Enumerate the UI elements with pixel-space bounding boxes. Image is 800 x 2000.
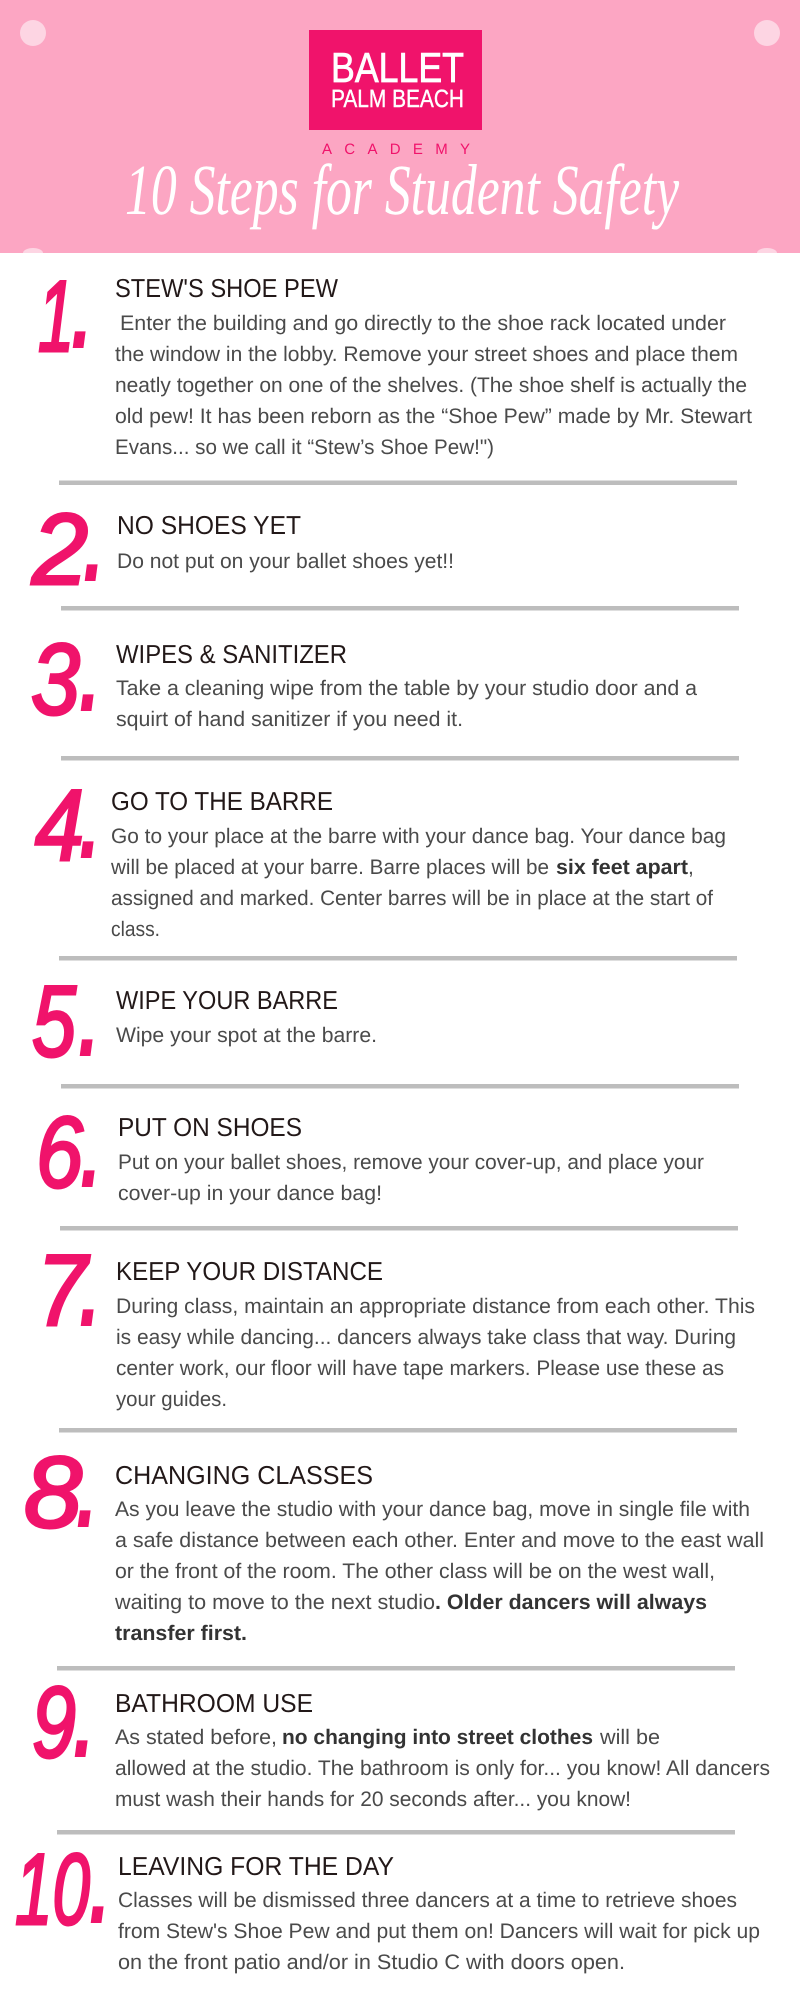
number 4: . <box>79 757 100 882</box>
body text: your guides. <box>116 1388 227 1411</box>
panel: step 5 <box>32 955 377 1080</box>
body text <box>115 312 752 459</box>
number 4: 4 <box>35 770 84 882</box>
body text: Put on your ballet shoes, remove your cover-up, and place your <box>118 1151 704 1174</box>
body text <box>116 1295 755 1411</box>
body text: As you leave the studio with your dance bag, move in single file with <box>115 1498 750 1521</box>
body text: Go to your place at the barre with your dance bag. Your dance bag <box>111 825 726 848</box>
body text: cover-up in your dance bag! <box>118 1182 382 1205</box>
heading: BATHROOM USE <box>115 1688 313 1718</box>
body text: Enter the building and go directly to the shoe rack located under <box>120 312 726 335</box>
body text: no changing into street clothes <box>282 1726 593 1749</box>
number 5: 5 <box>32 966 77 1078</box>
body text: must wash their hands for 20 seconds after... you know! <box>115 1788 631 1811</box>
number 1: . <box>71 247 92 372</box>
heading: WIPE YOUR BARRE <box>116 985 338 1015</box>
panel: step 4 <box>35 757 726 941</box>
body text <box>116 677 697 731</box>
body text: . Older dancers will always <box>435 1591 707 1614</box>
panel: step 7 <box>37 1225 755 1411</box>
number 5: . <box>78 955 99 1080</box>
body text: old pew! It has been reborn as the “Shoe Pew” made by Mr. Stewart <box>115 405 752 428</box>
heading: KEEP YOUR DISTANCE <box>116 1256 383 1286</box>
body text: center work, our floor will have tape markers. Please use these as <box>116 1357 724 1380</box>
heading: LEAVING FOR THE DAY <box>118 1851 394 1881</box>
body text: squirt of hand sanitizer if you need it. <box>116 708 463 731</box>
body text <box>118 1151 704 1205</box>
number 2 <box>31 480 104 606</box>
body text: a safe distance between each other. Enter and move to the east wall <box>115 1529 764 1552</box>
number 3: . <box>79 610 100 735</box>
body text <box>110 825 726 941</box>
number 10: . <box>89 1822 110 1947</box>
number 8: 8 <box>24 1437 82 1549</box>
panel: step 8 <box>24 1426 764 1645</box>
number 6: 6 <box>36 1097 84 1209</box>
body text: Do not put on your ballet shoes yet!! <box>117 550 454 573</box>
body text: Take a cleaning wipe from the table by your studio door and a <box>116 677 697 700</box>
body text: waiting to move to the next studio <box>114 1591 435 1614</box>
heading: NO SHOES YET <box>117 510 301 540</box>
body text: Wipe your spot at the barre. <box>116 1024 377 1047</box>
number 6: . <box>80 1086 101 1211</box>
body text <box>114 1498 764 1645</box>
body text: , <box>688 856 694 879</box>
number 2: . <box>83 480 104 605</box>
number 2: 2 <box>31 494 88 606</box>
number 8: . <box>76 1426 97 1551</box>
body text: class. <box>111 918 160 941</box>
body text: neatly together on one of the shelves. (The shoe shelf is actually the <box>115 374 747 397</box>
heading: PUT ON SHOES <box>118 1112 302 1142</box>
body text <box>118 1889 760 1974</box>
body text: assigned and marked. Center barres will be in place at the start of <box>111 887 713 910</box>
body text: Classes will be dismissed three dancers at a time to retrieve shoes <box>118 1889 737 1912</box>
number 1: 1 <box>38 261 74 373</box>
body text: the window in the lobby. Remove your street shoes and place them <box>115 343 738 366</box>
body text: During class, maintain an appropriate distance from each other. This <box>116 1295 755 1318</box>
panel: step 6 <box>36 1086 704 1211</box>
number 7: . <box>79 1225 100 1350</box>
heading: WIPES & SANITIZER <box>116 639 347 669</box>
panel: step 2 <box>31 480 454 606</box>
body text: will be placed at your barre. Barre places will be <box>110 856 549 879</box>
body text: allowed at the studio. The bathroom is only for... you know! All dancers <box>115 1757 770 1780</box>
logo: BALLET <box>331 44 464 91</box>
body text: will be <box>599 1726 660 1749</box>
number 10: 10 <box>15 1834 90 1946</box>
body text: from Stew's Shoe Pew and put them on! Dancers will wait for pick up <box>118 1920 760 1943</box>
number 3: 3 <box>31 624 80 736</box>
number 9: 9 <box>32 1667 76 1779</box>
panel: step 3 <box>31 610 697 736</box>
body text: six feet apart <box>556 856 688 879</box>
number 9: . <box>73 1656 94 1781</box>
logo: PALM BEACH <box>331 85 464 113</box>
heading: GO TO THE BARRE <box>111 786 333 816</box>
panel: header <box>0 0 800 253</box>
number 8 <box>24 1426 97 1551</box>
body text <box>115 1726 770 1811</box>
panel: step 9 <box>32 1656 770 1811</box>
panel: step 1 <box>38 247 752 459</box>
body text: As stated before, <box>115 1726 277 1749</box>
body text: Evans... so we call it “Stew’s Shoe Pew!") <box>115 436 494 459</box>
body text: or the front of the room. The other class will be on the west wall, <box>115 1560 715 1583</box>
body text: on the front patio and/or in Studio C with doors open. <box>118 1951 625 1974</box>
logo <box>309 30 482 130</box>
heading: CHANGING CLASSES <box>115 1460 373 1490</box>
heading: STEW'S SHOE PEW <box>115 273 338 303</box>
panel: step 10 <box>15 1822 760 1974</box>
number 7: 7 <box>37 1235 90 1347</box>
body text: transfer first. <box>115 1622 247 1645</box>
body text: is easy while dancing... dancers always take class that way. During <box>116 1326 736 1349</box>
academy label: ACADEMY <box>322 141 470 158</box>
